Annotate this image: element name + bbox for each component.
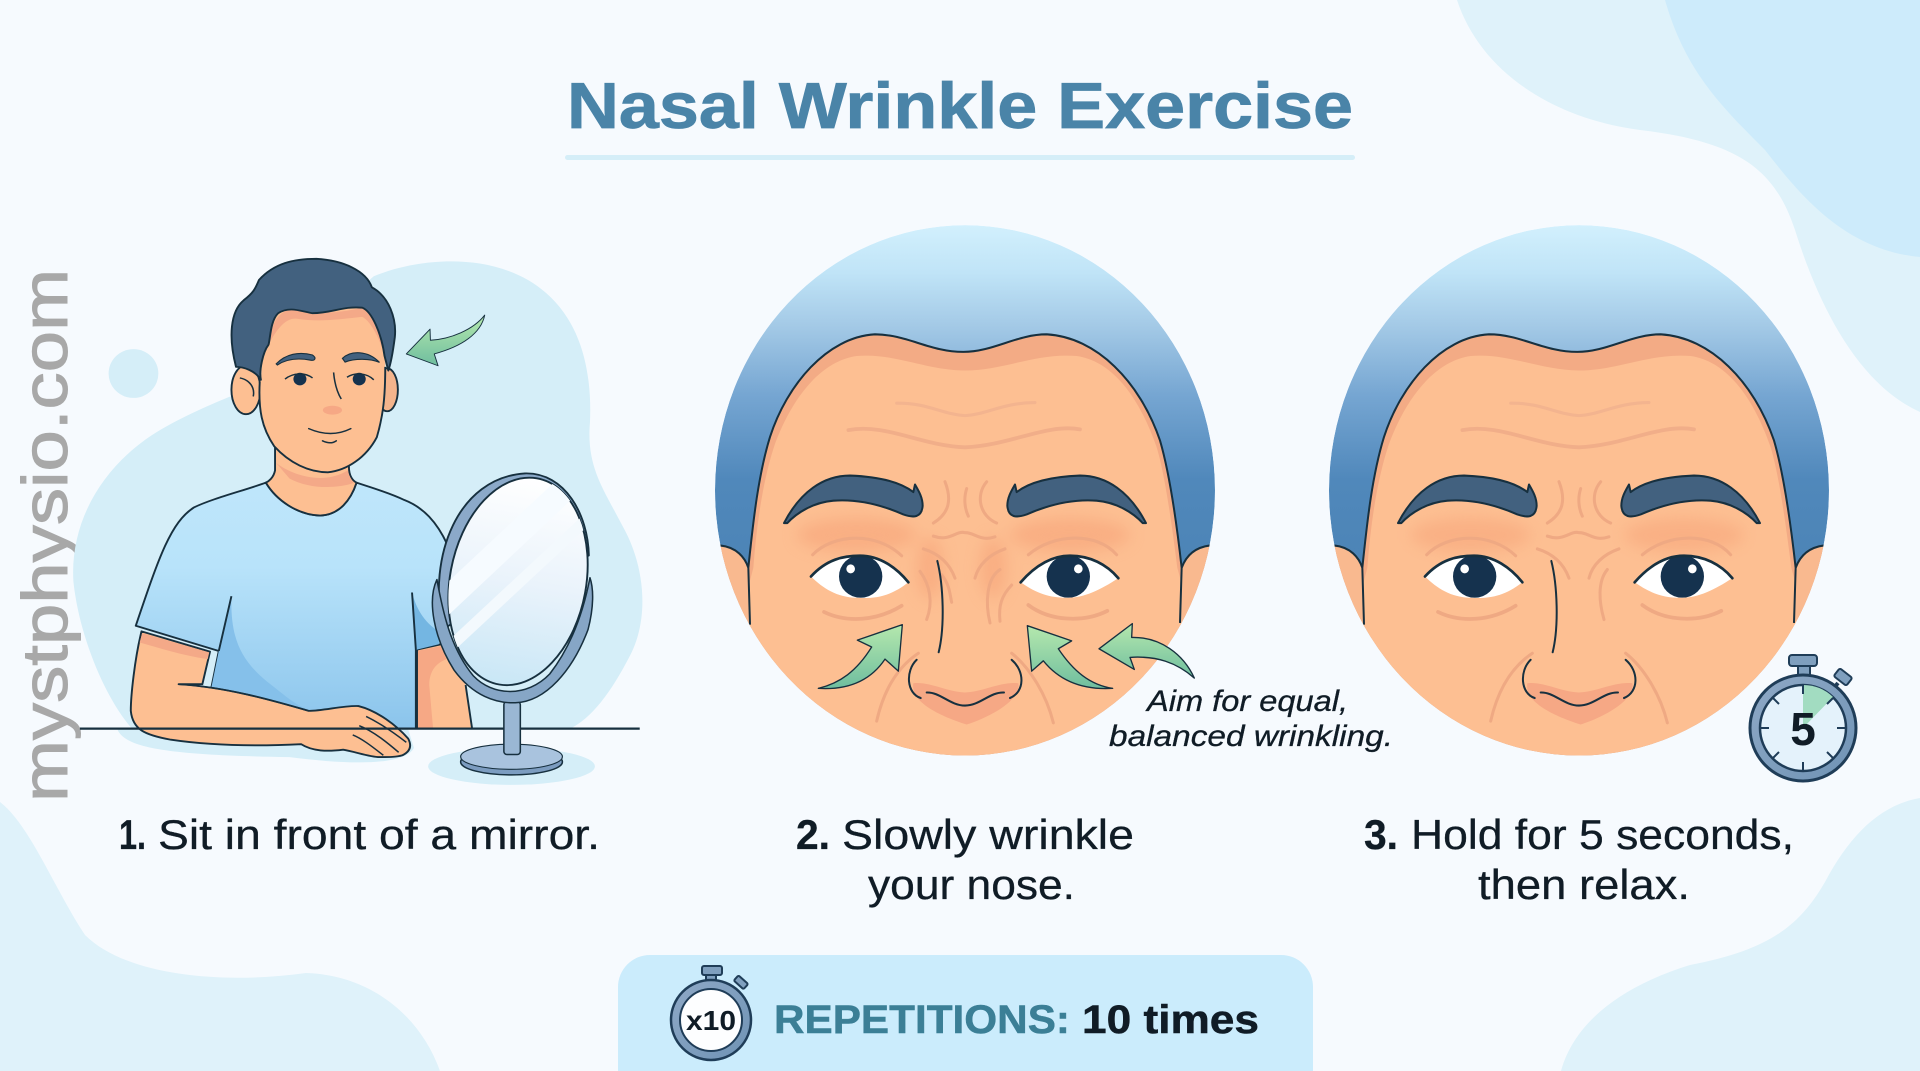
left eye <box>811 555 908 598</box>
right eye <box>1021 555 1118 598</box>
background blob: top right darker <box>1665 0 1920 257</box>
skin shadow band <box>1334 336 1824 756</box>
eye shadow patches <box>797 518 1130 599</box>
nose shade <box>1527 683 1633 725</box>
title: Nasal Wrinkle Exercise <box>567 69 1353 142</box>
skin <box>742 356 1188 756</box>
icon: 5 second stopwatch <box>1750 655 1856 781</box>
step 3 label <box>1364 811 1794 908</box>
arrow: left cheek <box>818 625 902 689</box>
wrinkles <box>813 403 1117 723</box>
repetitions value: 10 times <box>1082 998 1259 1042</box>
panel: step 3 face <box>1314 225 1847 771</box>
eyebrows <box>276 353 380 365</box>
right eye <box>1635 555 1732 598</box>
mirror shadow <box>428 748 595 785</box>
skin <box>1356 356 1802 756</box>
arrow: note pointer <box>1099 624 1194 678</box>
eyes <box>285 373 374 385</box>
background blob: bottom right <box>1561 798 1920 1071</box>
ears <box>231 365 398 414</box>
step 2 label: Slowly wrinkle <box>842 811 1134 858</box>
skin shadow band <box>720 336 1210 756</box>
icon: x10 stopwatch: x10 <box>686 1005 736 1036</box>
eyebrows <box>1398 476 1760 523</box>
icon: 5 second stopwatch: 5 <box>1790 703 1816 755</box>
left arm and hand <box>131 631 410 757</box>
panel: step 2 face <box>700 225 1233 771</box>
wrinkles <box>1427 403 1731 723</box>
repetitions label: REPETITIONS: <box>774 998 1070 1042</box>
nose <box>323 372 342 415</box>
decorative circle <box>109 349 158 398</box>
hairline and ear outline <box>1334 334 1824 625</box>
callout note <box>1109 685 1393 753</box>
panel: step 1 illustration <box>73 259 642 785</box>
backdrop blob <box>73 261 642 729</box>
background blob: top right light <box>1457 0 1920 412</box>
eye shadow patches <box>1411 518 1744 552</box>
step 3 label: 3. <box>1364 811 1398 858</box>
hair backdrop <box>715 225 1215 756</box>
repetitions panel <box>618 955 1313 1071</box>
eyebrows <box>784 476 1146 523</box>
neck <box>266 448 357 516</box>
hairline and ear outline <box>720 334 1210 625</box>
arrow: green pointing to head <box>406 315 485 366</box>
callout note: balanced wrinkling. <box>1109 720 1393 753</box>
left eye <box>1425 555 1522 598</box>
background blob: bottom left <box>0 802 440 1071</box>
title underline <box>565 155 1355 160</box>
step 3 label: Hold for 5 seconds, <box>1411 811 1794 858</box>
right arm <box>416 642 472 729</box>
icon: x10 stopwatch <box>671 966 751 1060</box>
nose shade <box>913 683 1019 725</box>
step 2 label: your nose. <box>868 861 1075 908</box>
step 1 label: 1. <box>119 811 146 858</box>
step 2 label <box>796 811 1134 908</box>
shirt <box>136 483 447 729</box>
ears <box>720 546 1210 624</box>
mouth <box>309 429 351 443</box>
hairline shadow <box>269 308 384 356</box>
step 1 label: Sit in front of a mirror. <box>158 811 600 858</box>
step 2 label: 2. <box>796 811 830 858</box>
table shadow <box>117 729 414 762</box>
nose lines <box>909 561 1021 706</box>
nose lines <box>1523 561 1635 706</box>
watermark: mystphysio.com <box>9 269 81 802</box>
step 3 label: then relax. <box>1478 861 1690 908</box>
hair backdrop <box>1329 225 1829 756</box>
neck shadow <box>276 463 354 487</box>
ears <box>1334 546 1824 624</box>
mirror <box>432 467 604 775</box>
hair <box>232 259 395 380</box>
callout note: Aim for equal, <box>1145 685 1348 718</box>
face <box>259 304 385 472</box>
arrow: right cheek <box>1027 626 1113 689</box>
table line <box>80 726 640 732</box>
